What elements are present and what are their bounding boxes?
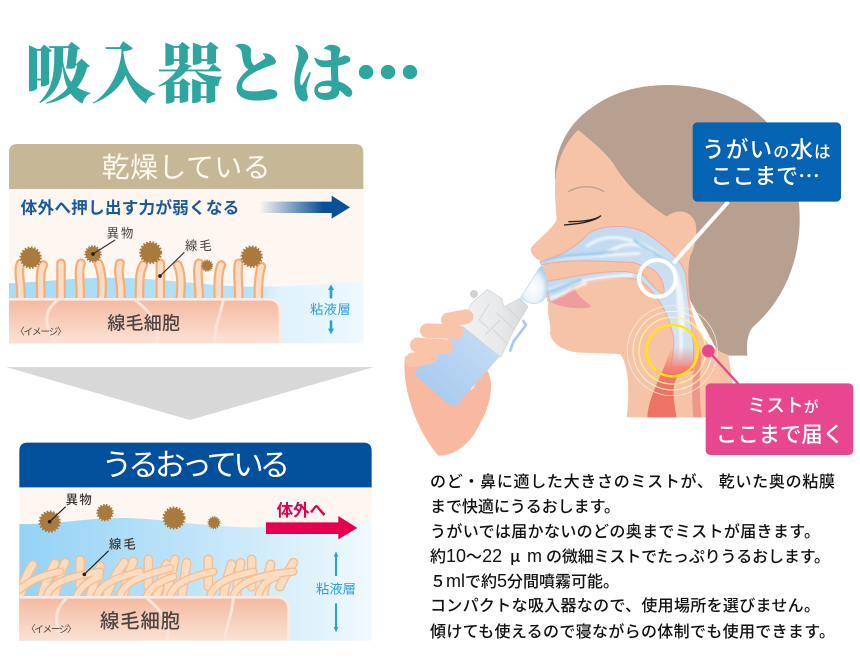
caption: weak push force: 体外へ押し出す力が弱くなる [21,197,239,217]
caption: outward: 体外へ [277,501,326,520]
illustration: head profile with nebulizer [404,85,853,456]
label: mucus layer [316,551,356,632]
header band: moist: うるおっている [102,449,290,483]
hand: palm [404,350,491,456]
ciliated cell [19,597,289,641]
label: cilia: 線毛 [185,238,212,253]
body text: コンパクトな吸入器なので、使用場所を選びません。 [430,597,820,615]
ciliated cell: 〈イメージ〉 [15,327,67,338]
body text: まで快適にうるおします。 [430,498,620,516]
label: mucus layer [310,284,351,334]
body text: μ [510,543,520,567]
label: mucus layer: 粘液層 [316,581,356,596]
panel: moist airway [19,443,372,641]
callout: gargle water [693,122,841,202]
nebulizer bottle [415,325,501,407]
throat vessels [647,323,702,417]
header band: moist [19,443,372,487]
label: cilia: 線毛 [109,536,136,551]
title: 吸入器とは… [25,21,421,117]
foreign particles [40,505,220,532]
ciliated cell: 線毛細胞 [100,610,180,632]
label: foreign body: 異物 [107,227,133,241]
callout: mist reach: ここまで届く [716,423,844,447]
callout: gargle water: うがいの水は [702,136,831,162]
label: foreign body [48,492,92,523]
hand: fingers [413,317,466,360]
body text: 傾けても使えるので寝ながらの体制でも使用できます。 [430,622,835,641]
callout marker: gargle limit [639,202,728,297]
label: foreign body: 異物 [66,492,92,507]
callout marker: pink pointer [702,345,739,385]
arrow: weak outward flow [259,196,350,219]
header band: dry [9,144,363,189]
body text [430,472,835,641]
airway with mist [540,227,694,367]
arrow: outward flow [266,516,357,539]
callout: mist reach: ミストが [747,395,819,416]
callout: mist reach [706,383,853,455]
foreign particles [21,242,262,271]
face and neck [531,130,738,417]
panel: dry airway [9,144,363,343]
label: cilia [82,536,136,576]
bent cilia [19,559,293,597]
nebulizer head [461,289,528,357]
body text: の微細ミストでたっぷりうるおします。 [546,548,830,566]
body text: うがいでは届かないのどの奥までミストが届きます。 [430,522,820,541]
header band: dry: 乾燥している [102,152,271,183]
ciliated cell: 線毛細胞 [107,313,180,333]
body text: ５mlで約5分間噴霧可能。 [430,571,619,591]
label: foreign body [91,227,133,256]
label: cilia [158,238,212,278]
cilia [19,263,261,300]
mucus layer [19,518,372,641]
hair [555,85,800,356]
tongue [548,287,591,308]
arrow: grey transition [6,367,374,420]
ciliated cell [9,299,280,343]
mucus layer [9,278,363,343]
callout: gargle water: ここまで… [711,159,820,191]
mist cone [521,265,548,304]
body text: 約10～22 [430,546,502,566]
body text: m [527,546,542,566]
eyebrow [568,187,604,192]
closed eye [564,216,601,225]
label: mucus layer: 粘液層 [310,302,351,317]
callout marker: mist reach rings [627,306,717,396]
ciliated cell: 〈イメージ〉 [26,625,77,636]
body text: のど・鼻に適した大きさのミストが、 乾いた奥の粘膜 [430,472,835,491]
